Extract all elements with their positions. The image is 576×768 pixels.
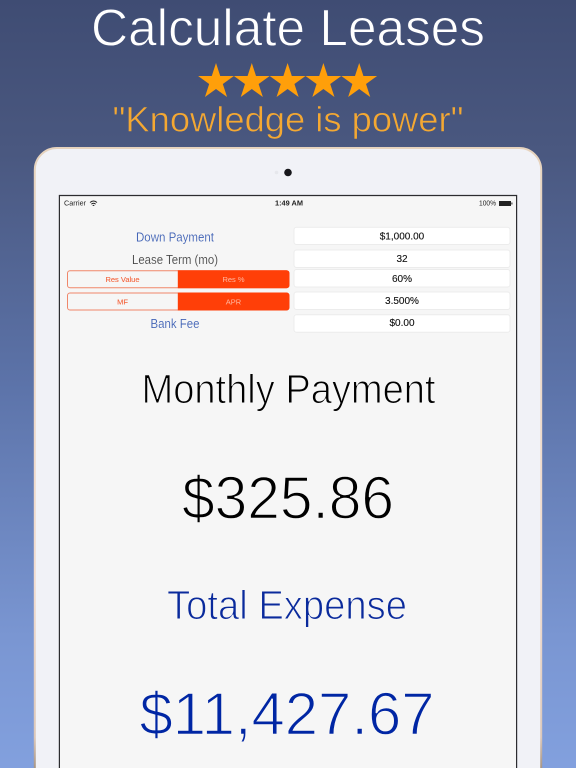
status bar: 1:49 AM <box>275 201 303 208</box>
tablet device <box>35 148 541 768</box>
value: total expense: $11,427.67 <box>140 680 434 747</box>
label: lease term: Lease Term (mo) <box>132 252 218 267</box>
heading: total expense: Total Expense <box>167 582 407 628</box>
input: rate: 3.500% <box>385 296 419 307</box>
input: bank fee <box>294 315 510 332</box>
input: residual <box>294 270 510 287</box>
input: down payment: $1,000.00 <box>380 232 425 243</box>
tagline: "Knowledge is power" <box>112 100 464 139</box>
input: lease term: 32 <box>396 254 408 265</box>
status bar <box>64 200 512 208</box>
segmented control: residual: Res Value <box>105 275 140 284</box>
value: monthly payment: $325.86 <box>182 464 394 531</box>
app screen <box>59 196 517 768</box>
segmented control: rate <box>68 292 290 310</box>
segmented control: rate: MF <box>117 298 128 306</box>
input: rate <box>294 292 510 310</box>
device bezel <box>35 148 541 768</box>
status bar: 100% <box>479 200 496 208</box>
input: bank fee: $0.00 <box>389 318 415 329</box>
input: residual: 60% <box>392 274 412 285</box>
label: bank fee: Bank Fee <box>150 316 200 331</box>
status bar: Carrier <box>64 200 87 208</box>
five star rating <box>198 63 377 97</box>
input: lease term <box>294 250 510 268</box>
heading: monthly payment: Monthly Payment <box>142 366 436 412</box>
camera <box>275 169 292 176</box>
wifi icon <box>90 201 97 206</box>
segmented control: rate: APR <box>226 298 242 306</box>
battery icon <box>499 201 512 206</box>
label: down payment: Down Payment <box>136 230 214 245</box>
title: Calculate Leases <box>91 0 485 58</box>
segmented control: residual <box>68 270 290 288</box>
segmented control: residual: Res % <box>222 275 245 284</box>
input: down payment <box>294 227 510 244</box>
